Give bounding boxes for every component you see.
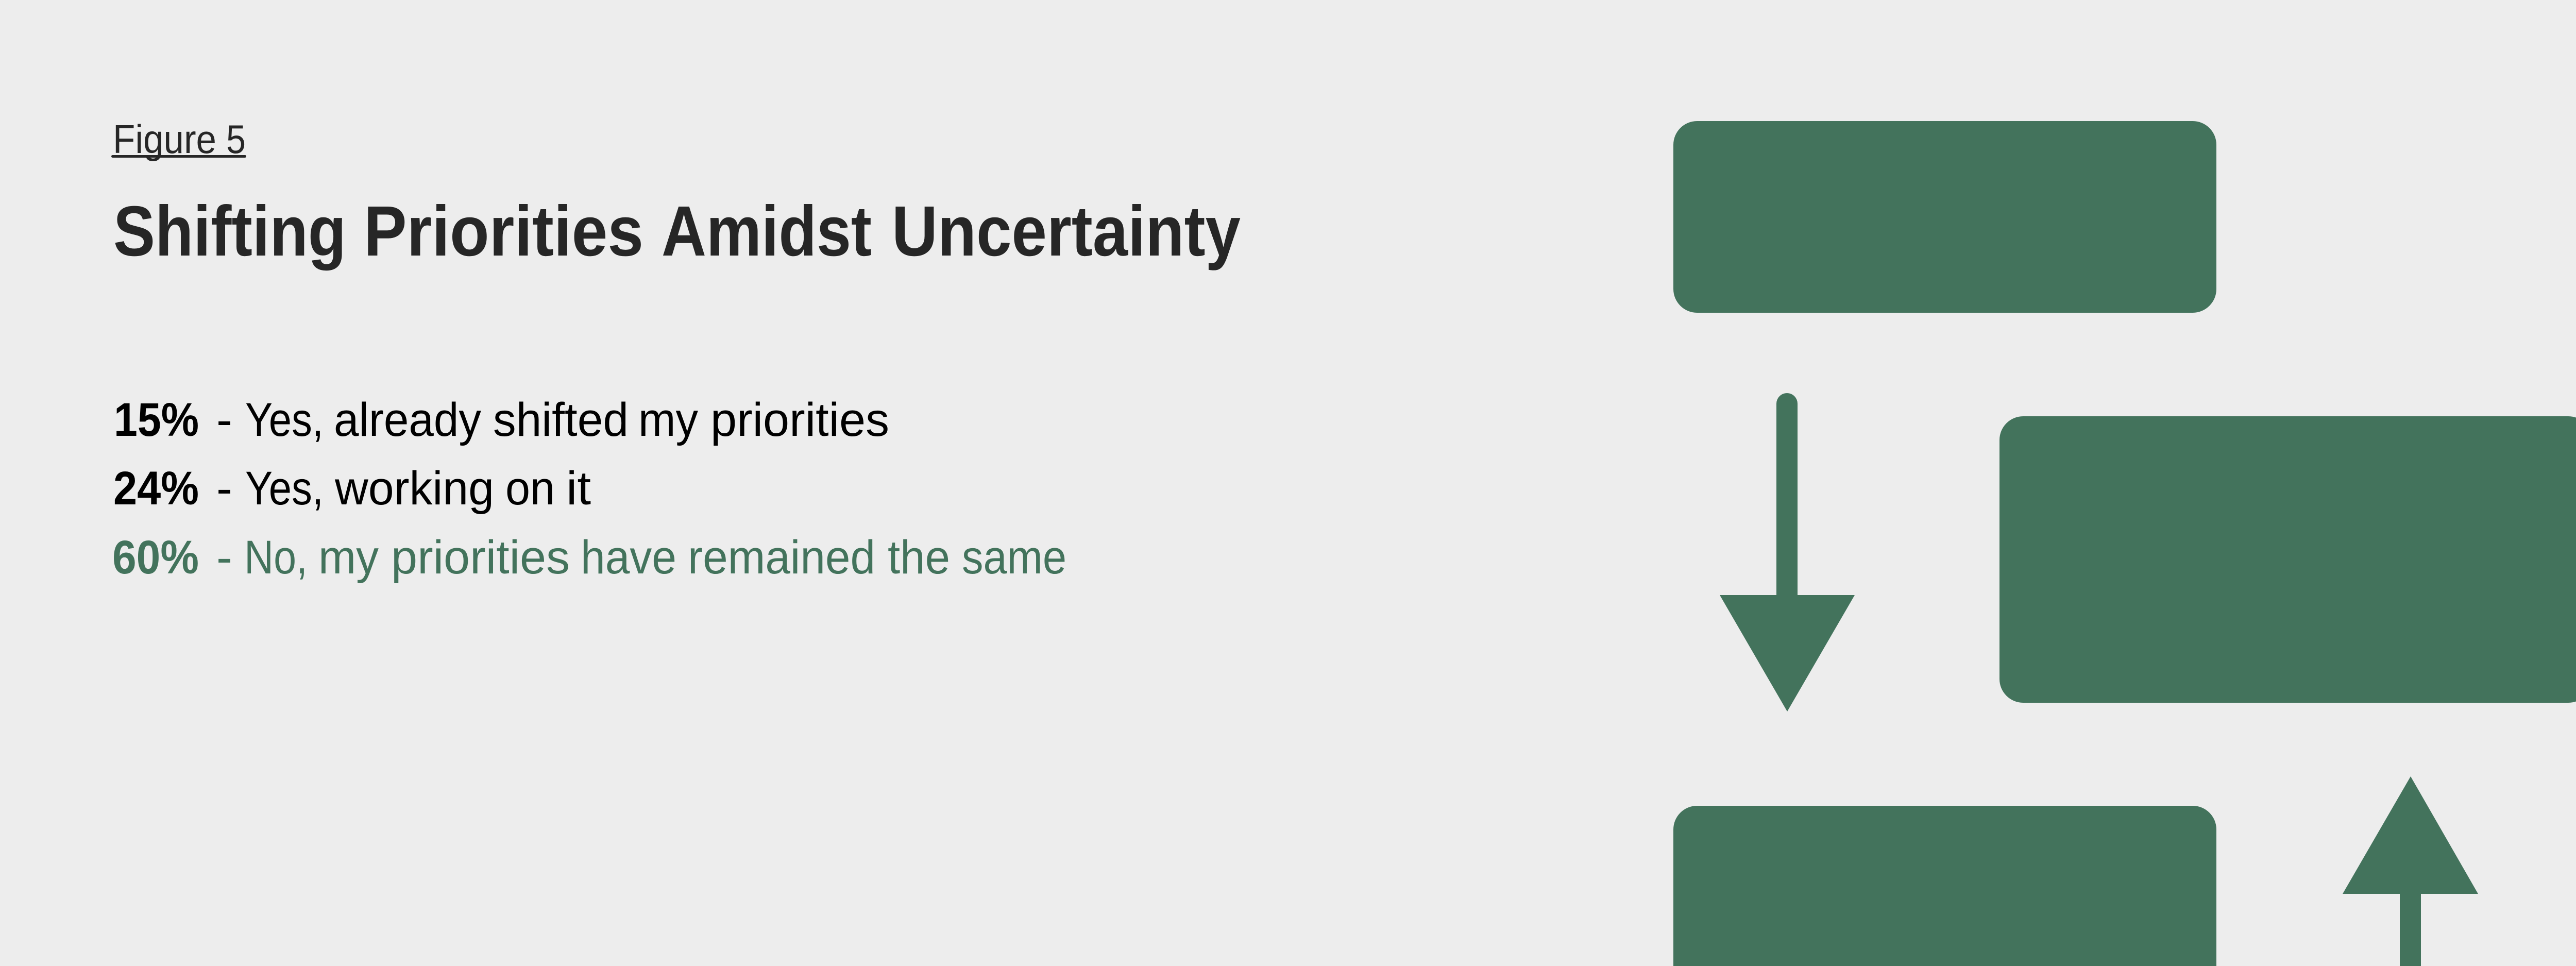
arrow: down [1720,393,1855,711]
survey result: 60% highlighted: the [888,531,950,584]
survey result: 24%: 24% [113,462,199,515]
survey result: 60% highlighted: same [962,531,1066,584]
survey result: 60% highlighted: 60% [112,531,199,584]
survey result: 24%: Yes, [245,462,324,515]
survey result: 60% highlighted: remained [688,531,875,584]
figure label: 5 [226,116,246,162]
figure label: Figure [113,116,216,162]
survey result: 15%: - [216,394,232,446]
survey result: 24%: - [216,462,232,515]
title: Shifting [113,192,346,271]
survey result: 60% highlighted: my [318,531,379,584]
survey result: 15%: already [334,394,481,446]
top box [1673,121,2216,313]
right box [1999,416,2576,703]
title: Uncertainty [892,192,1241,271]
survey result: 60% highlighted: - [216,531,232,584]
survey result: 15%: Yes, [245,394,324,446]
survey result: 15%: shifted [493,394,629,446]
survey result: 24%: it [566,462,591,515]
survey result: 60% highlighted: priorities [391,531,570,584]
survey result: 60% highlighted: No, [244,531,308,584]
survey result: 60% highlighted [112,531,1066,584]
survey result: 15%: my [638,394,698,446]
survey result: 60% highlighted: have [581,531,676,584]
title: Amidst [662,192,872,271]
bottom box [1673,806,2216,966]
title [113,192,1241,271]
survey result: 15%: 15% [114,394,199,446]
title: Priorities [364,192,643,271]
survey result: 15%: priorities [710,394,889,446]
survey result: 15% [114,394,889,446]
survey result: 24%: on [505,462,555,515]
survey result: 24%: working [334,462,494,515]
survey result: 24% [113,462,591,515]
arrow: up [2343,776,2478,966]
